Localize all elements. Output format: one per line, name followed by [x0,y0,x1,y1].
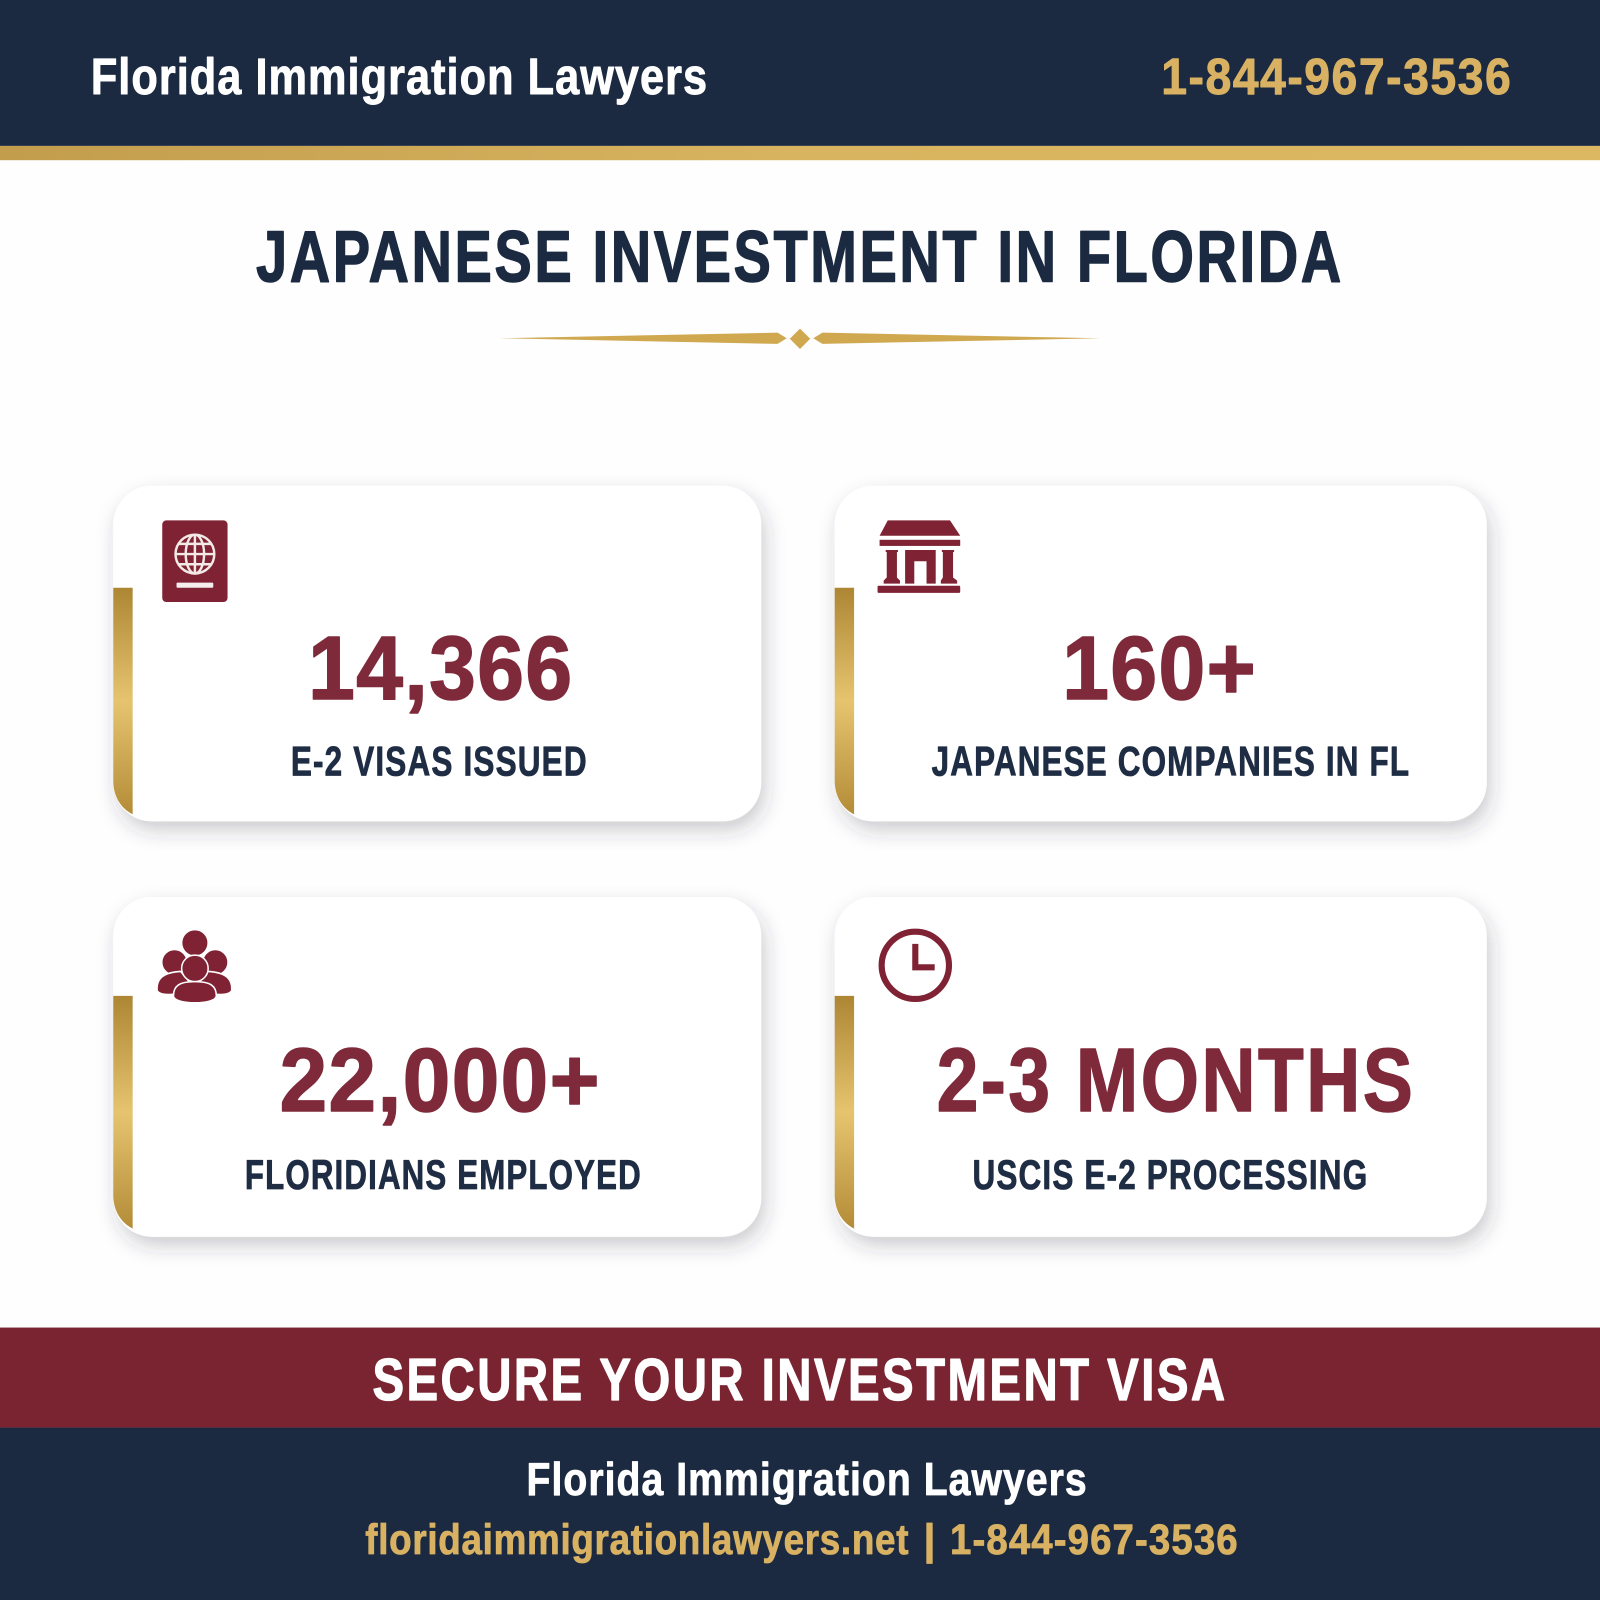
footer band [0,1428,1600,1600]
label: USCIS E-2 processing: USCIS E-2 PROCESSING [972,1151,1368,1198]
icon: passport [162,520,228,602]
label: Japanese companies in FL: JAPANESE COMPANIES IN FL [932,738,1410,785]
stat: 22,000+: 22,000+ [280,1031,601,1131]
panel: Floridians employed [113,897,761,1237]
stat: 160+: 160+ [1062,619,1257,719]
panel: E-2 visas issued [113,486,761,821]
panel: USCIS E-2 processing [835,897,1487,1237]
footer website and phone: | [923,1516,935,1564]
panel: Japanese companies in FL [835,486,1487,821]
footer website and phone: 1-844-967-3536 [950,1516,1239,1564]
call-to-action text: SECURE YOUR INVESTMENT VISA [372,1346,1228,1413]
footer firm name: Florida Immigration Lawyers [527,1453,1088,1505]
header phone number: 1-844-967-3536 [1161,48,1512,105]
label: Floridians employed: FLORIDIANS EMPLOYED [245,1151,642,1198]
icon: institution building [878,520,960,593]
title ornament divider [500,329,1100,349]
stat: 2-3 months: 2-3 MONTHS [937,1031,1415,1131]
label: E-2 visas issued: E-2 VISAS ISSUED [291,738,588,785]
icon: clock [882,932,949,999]
header band [0,0,1600,160]
header firm name: Florida Immigration Lawyers [91,48,708,105]
stat: 14,366: 14,366 [308,619,573,719]
footer website and phone: floridaimmigrationlawyers.net [365,1516,909,1564]
icon: group of people [157,930,232,1003]
call-to-action band [0,1328,1600,1428]
